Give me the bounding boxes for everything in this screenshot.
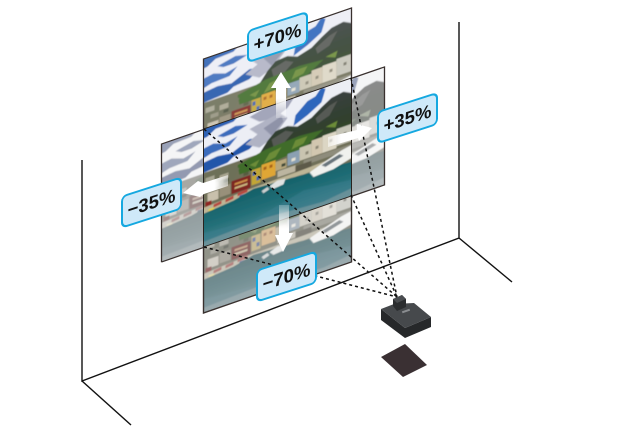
projection dashed lines — [204, 78, 397, 297]
image: centre position — [202, 75, 354, 250]
label: -70% — [257, 252, 316, 301]
projector — [381, 295, 431, 338]
label: -35%: −35% — [128, 186, 176, 222]
arrow: up — [271, 72, 291, 118]
label: +70%: +70% — [254, 20, 302, 56]
label: +35% — [378, 93, 437, 143]
image: shifted left -35% — [160, 129, 203, 263]
label: +35%: +35% — [384, 101, 432, 137]
arrow: right — [328, 124, 372, 147]
image: shifted down -70% — [202, 194, 352, 314]
label: -70%: −70% — [263, 260, 311, 296]
remote pad — [381, 344, 427, 377]
arrow: down — [275, 205, 293, 252]
wall and floor lines — [82, 22, 512, 425]
image: shifted up +70% — [202, 7, 352, 130]
image: shifted right +35% — [352, 66, 386, 197]
label: +70% — [248, 12, 307, 62]
arrow: left — [183, 175, 228, 197]
label: -35% — [122, 178, 181, 227]
